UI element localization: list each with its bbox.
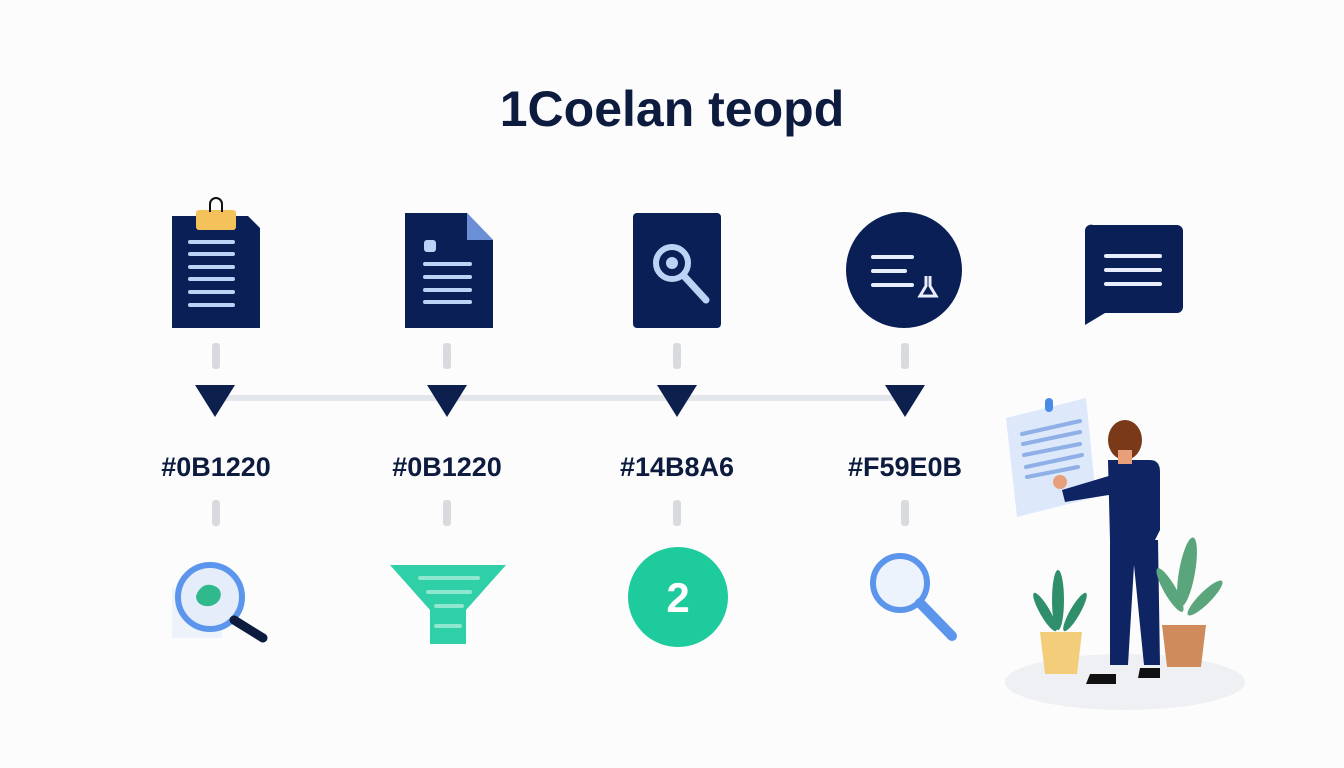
- label 2: #0B1220: [392, 452, 502, 482]
- icon: document: [405, 213, 493, 328]
- illustration: person with document and plants: [1005, 398, 1245, 710]
- icon: circle list: [846, 212, 962, 328]
- icon: clipboard: [172, 198, 260, 328]
- icon: number 2 circle: [628, 547, 728, 647]
- label 3: #14B8A6: [620, 452, 734, 482]
- label 1: #0B1220: [161, 452, 271, 482]
- connectors: [212, 343, 909, 526]
- icon: number 2 circle: 2: [666, 574, 690, 621]
- label 4: #F59E0B: [848, 452, 962, 482]
- icon: magnifier with leaf: [172, 565, 263, 638]
- icon: search document: [633, 213, 721, 328]
- icon: funnel: [390, 565, 506, 644]
- timeline line: [215, 395, 905, 401]
- arrow markers: [195, 385, 925, 417]
- title: 1Coelan teopd: [500, 81, 844, 137]
- icon: speech bubble: [1085, 225, 1183, 325]
- icon: magnifier: [873, 556, 952, 636]
